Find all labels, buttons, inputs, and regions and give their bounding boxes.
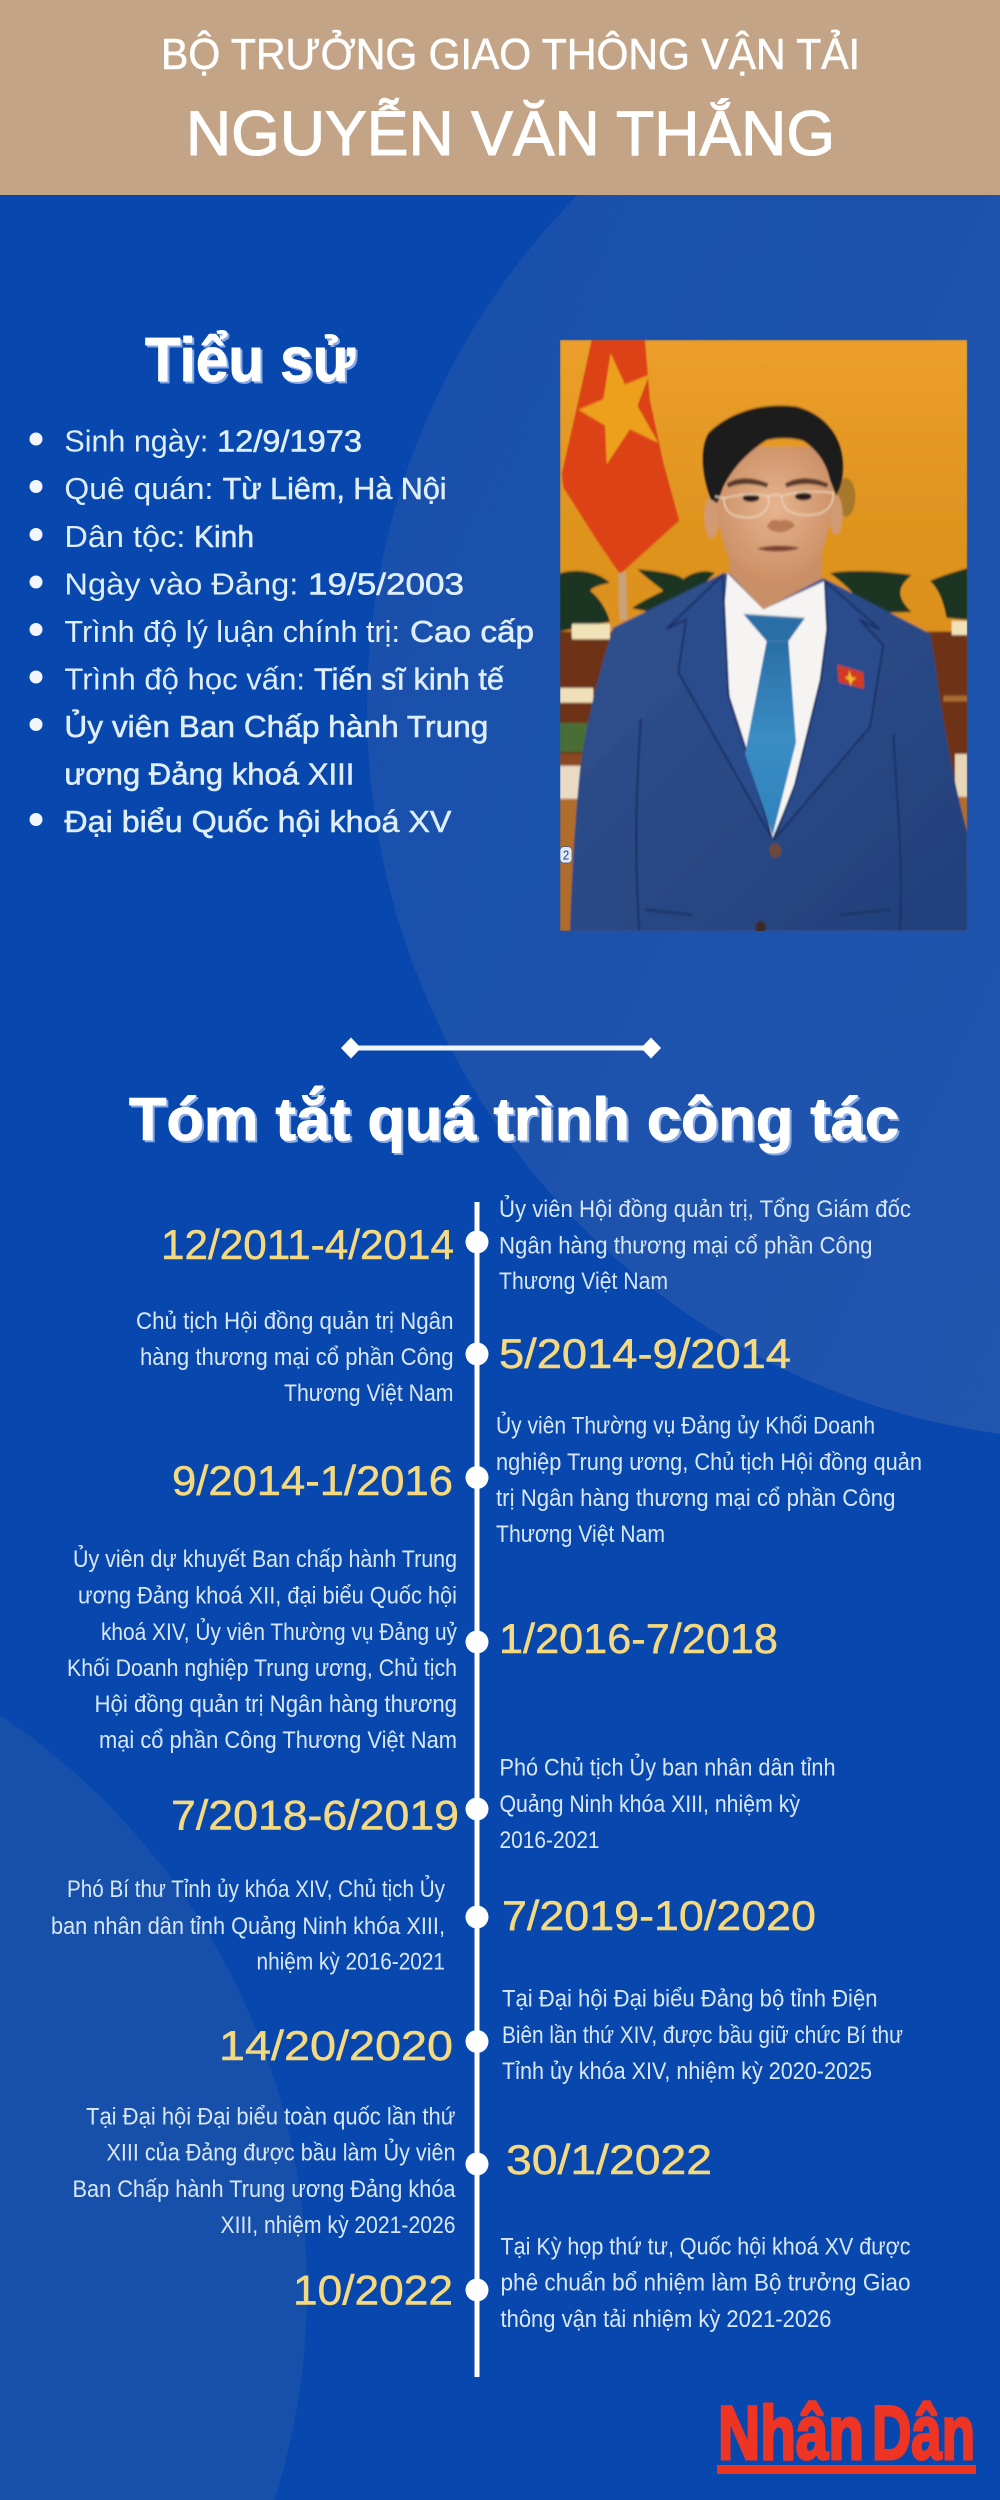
biography list: Trình độ lý luận chính trị: (64, 614, 400, 649)
entry: 7/2019-10/2020: nhiệm kỳ 2016-2021 (256, 1948, 445, 1976)
entry: 5/2014-9/2014: 5/2014-9/2014 (499, 1330, 791, 1377)
biography list: Từ Liêm, Hà Nội (223, 471, 447, 506)
shirt (723, 573, 827, 838)
biography list: Ngày vào Đảng: (64, 566, 298, 602)
sleeve seams (636, 719, 901, 931)
entry: 7/2019-10/2020: Phó Bí thư Tỉnh ủy khóa XIV, Chủ tịch Ủy (67, 1874, 445, 1903)
small numbered tag (560, 847, 572, 863)
ears (704, 495, 719, 538)
entry: 12/2011-4/2014: Ủy viên Hội đồng quản trị, Tổng Giám đốc (499, 1194, 911, 1223)
biography list: ương Đảng khoá XIII (64, 756, 354, 792)
entry: 7/2018-6/2019: Quảng Ninh khóa XIII, nhiệm kỳ (500, 1791, 800, 1818)
entry: 30/1/2022: Ban Chấp hành Trung ương Đảng khóa (72, 2176, 456, 2203)
face (716, 445, 834, 566)
biography list: Trình độ học vấn: (64, 662, 305, 696)
heading: biography: Tiểu sử (145, 326, 355, 395)
entry: 30/1/2022 (72, 2104, 712, 2239)
entry: 1/2016-7/2018 (67, 1544, 778, 1754)
biography list: Đại biểu Quốc hội khoá XV (64, 804, 452, 839)
tie (743, 614, 805, 835)
entry: 7/2018-6/2019: 7/2018-6/2019 (171, 1792, 459, 1838)
eyebrows and eyes (727, 478, 828, 502)
entry: 10/2022: thông vận tải nhiệm kỳ 2021-2026 (500, 2306, 832, 2333)
entry: 7/2018-6/2019: 2016-2021 (500, 1827, 600, 1854)
entry: 7/2018-6/2019 (171, 1752, 836, 1854)
entry: 12/2011-4/2014: Thương Việt Nam (499, 1268, 668, 1295)
entry: 1/2016-7/2018: Khối Doanh nghiệp Trung ương, Chủ tịch (67, 1655, 457, 1682)
small numbered tag: 2 (563, 848, 569, 863)
entry: 1/2016-7/2018: 1/2016-7/2018 (499, 1615, 778, 1662)
lapel pin (837, 665, 864, 689)
entry: 9/2014-1/2016: Ủy viên Thường vụ Đảng ủy Khối Doanh (496, 1410, 875, 1440)
entry: 5/2014-9/2014: hàng thương mại cổ phần Công (140, 1344, 454, 1371)
entry: 7/2019-10/2020: ban nhân dân tỉnh Quảng Ninh khóa XIII, (51, 1913, 445, 1940)
entry: 1/2016-7/2018: Ủy viên dự khuyết Ban chấp hành Trung (73, 1544, 457, 1573)
biography list: Kinh (194, 519, 254, 554)
entry: 1/2016-7/2018: ương Đảng khoá XII, đại biểu Quốc hội (78, 1582, 457, 1610)
entry: 12/2011-4/2014: Ngân hàng thương mại cổ phần Công (499, 1232, 872, 1260)
title line: position: BỘ TRƯỞNG GIAO THÔNG VẬN TẢI (161, 28, 860, 79)
heading: career summary: Tóm tắt quá trình công tác (129, 1086, 899, 1153)
neck (728, 552, 823, 610)
entry: 9/2014-1/2016: Thương Việt Nam (496, 1521, 665, 1548)
entry: 30/1/2022: XIII, nhiệm kỳ 2021-2026 (220, 2212, 456, 2239)
entry: 5/2014-9/2014: Thương Việt Nam (284, 1380, 454, 1407)
entry: 10/2022: phê chuẩn bổ nhiệm làm Bộ trưởng Giao (500, 2270, 910, 2296)
timeline axis (474, 1202, 480, 2377)
entry: 9/2014-1/2016: trị Ngân hàng thương mại cổ phần Công (496, 1485, 896, 1512)
entry: 14/20/2020: Biên lần thứ XIV, được bầu giữ chức Bí thư (502, 2022, 903, 2049)
entry: 12/2011-4/2014: 12/2011-4/2014 (161, 1221, 454, 1268)
entry: 10/2022 (293, 2234, 910, 2333)
biography list: Quê quán: (64, 471, 213, 506)
entry: 10/2022: Tại Kỳ họp thứ tư, Quốc hội khoá XV được (500, 2234, 910, 2260)
portrait photo (560, 340, 968, 931)
entry: 14/20/2020: 14/20/2020 (219, 2022, 453, 2069)
hair (703, 405, 843, 503)
entry: 1/2016-7/2018: Hội đồng quản trị Ngân hàng thương (94, 1691, 457, 1718)
entry: 30/1/2022: 30/1/2022 (506, 2136, 712, 2183)
biography list: Tiến sĩ kinh tế (314, 662, 504, 696)
entry: 14/20/2020: Tỉnh ủy khóa XIV, nhiệm kỳ 2020-2025 (502, 2058, 872, 2085)
entry: 7/2019-10/2020 (51, 1874, 816, 1976)
entry: 12/2011-4/2014 (161, 1194, 911, 1295)
entry: 9/2014-1/2016 (172, 1410, 922, 1548)
desks (560, 621, 967, 931)
biography list: 12/9/1973 (217, 424, 362, 458)
entry: 7/2018-6/2019: Phó Chủ tịch Ủy ban nhân dân tỉnh (500, 1752, 836, 1782)
entry: 14/20/2020: Tại Đại hội Đại biểu Đảng bộ tỉnh Điện (502, 1986, 878, 2012)
biography list: Ủy viên Ban Chấp hành Trung (64, 708, 488, 744)
divider with diamonds (341, 1038, 661, 1058)
header banner (0, 0, 1000, 195)
entry: 14/20/2020 (219, 1986, 903, 2085)
biography list: Sinh ngày: (64, 424, 208, 458)
biography list (30, 424, 534, 839)
biography list: Dân tộc: (64, 519, 185, 554)
biography list: Cao cấp (410, 614, 534, 649)
entry: 10/2022: 10/2022 (293, 2266, 453, 2314)
entry: 7/2019-10/2020: 7/2019-10/2020 (502, 1892, 816, 1939)
small flower decoration (837, 478, 855, 517)
biography list: 19/5/2003 (308, 566, 464, 602)
title line: name: NGUYỄN VĂN THẮNG (186, 98, 835, 169)
nose and mouth (757, 520, 800, 551)
logo: Nhân Dân: Nhân (718, 2391, 864, 2476)
entry: 30/1/2022: XIII của Đảng được bầu làm Ủy viên (106, 2138, 456, 2166)
entry: 1/2016-7/2018: mại cổ phần Công Thương Việt Nam (99, 1727, 457, 1754)
entry: 9/2014-1/2016: nghiệp Trung ương, Chủ tịch Hội đồng quản (496, 1449, 922, 1476)
jacket button (769, 844, 781, 858)
lapels (667, 575, 883, 840)
entry: 9/2014-1/2016: 9/2014-1/2016 (172, 1457, 453, 1504)
flag (562, 340, 679, 620)
plants (560, 568, 967, 631)
entry: 1/2016-7/2018: khoá XIV, Ủy viên Thường vụ Đảng uỷ (101, 1617, 457, 1646)
suit jacket (570, 573, 967, 931)
glasses (715, 492, 833, 518)
entry: 5/2014-9/2014 (136, 1308, 791, 1407)
entry: 5/2014-9/2014: Chủ tịch Hội đồng quản trị Ngân (136, 1308, 454, 1335)
entry: 30/1/2022: Tại Đại hội Đại biểu toàn quốc lần thứ (86, 2104, 456, 2130)
